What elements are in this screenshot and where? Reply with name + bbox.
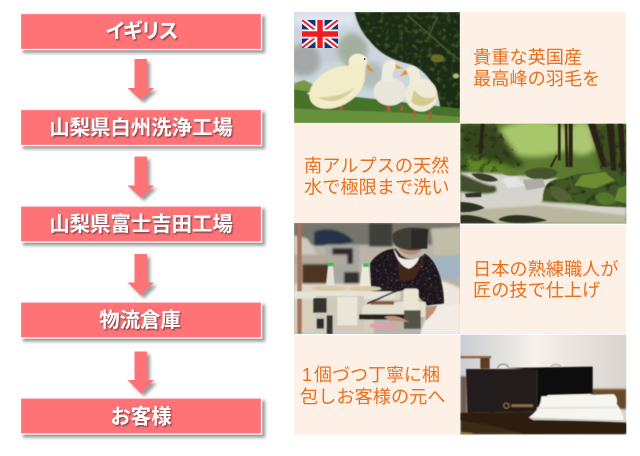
- flow step: イギリス: イギリス: [105, 20, 177, 43]
- flow step: 物流倉庫: [20, 302, 262, 338]
- flow step: 山梨県白州洗浄工場: 山梨県白州洗浄工場: [49, 116, 233, 140]
- ducks: [308, 66, 364, 110]
- photo: mountain stream in forest: [460, 120, 626, 224]
- photo: white ducks on grass: [287, 12, 460, 123]
- panel: caption 2: 南アルプスの天然: [304, 156, 449, 176]
- flow step: 山梨県富士吉田工場: 山梨県富士吉田工場: [49, 213, 233, 236]
- flow step: お客様: お客様: [110, 406, 172, 428]
- icon: Union Jack flag: [302, 20, 338, 48]
- arrow 2: [128, 156, 154, 198]
- panel: caption 4: 個づつ丁寧に梱: [314, 365, 440, 385]
- panel: caption 1: 貴重な英国産: [473, 48, 582, 68]
- panel: caption 3: [460, 225, 626, 334]
- panel: caption 4: 1: [302, 365, 312, 385]
- flow step: お客様: [20, 398, 262, 434]
- flow step: 山梨県白州洗浄工場: [20, 110, 262, 146]
- panel: caption 1: [460, 12, 626, 123]
- panel: caption 2: 水で極限まで洗い: [304, 178, 450, 198]
- photo: boxed pillow on wooden table: [460, 335, 626, 435]
- panel: caption 4: [294, 335, 460, 435]
- panel: caption 1: 最高峰の羽毛を: [473, 69, 600, 89]
- photo: craftsman at sewing machine: [294, 223, 460, 334]
- flow step: イギリス: [20, 14, 262, 50]
- flow step: 物流倉庫: 物流倉庫: [99, 309, 181, 332]
- arrow 4: [128, 352, 154, 394]
- panel: caption 3: 日本の熟練職人が: [473, 260, 619, 280]
- arrow 3: [128, 254, 154, 296]
- panel: caption 4: 包しお客様の元へ: [300, 387, 446, 407]
- panel: caption 3: 匠の技で仕上げ: [473, 280, 600, 300]
- arrow 1: [128, 59, 154, 100]
- flow step: 山梨県富士吉田工場: [20, 206, 262, 242]
- panel: caption 2: [294, 123, 460, 223]
